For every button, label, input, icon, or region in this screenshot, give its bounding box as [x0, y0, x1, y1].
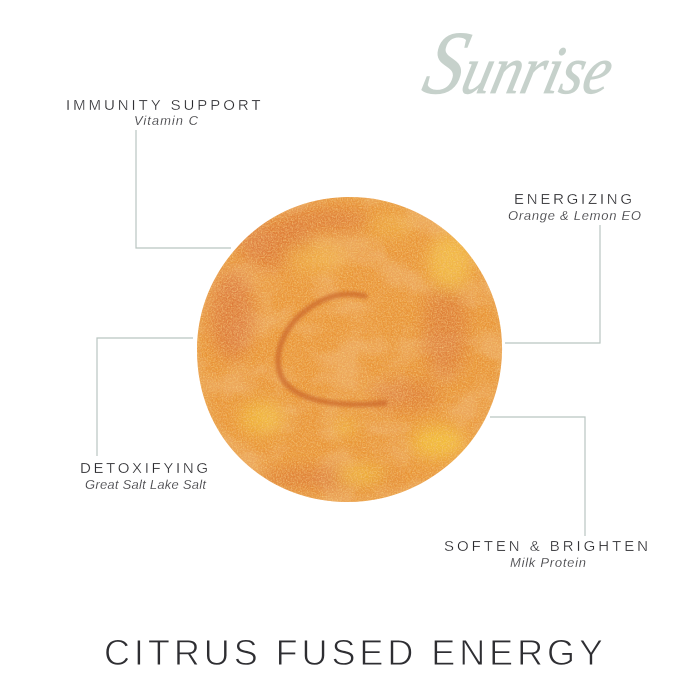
connector: soften	[490, 417, 585, 536]
subtext: great salt lake salt: Great Salt Lake Salt	[85, 477, 207, 492]
subtext: orange and lemon eo: Orange & Lemon EO	[508, 208, 641, 223]
heading: energizing: ENERGIZING	[514, 191, 632, 208]
heading: soften and brighten: SOFTEN & BRIGHTEN	[444, 538, 648, 555]
heading: immunity support: IMMUNITY SUPPORT	[66, 97, 260, 114]
subtext: milk protein: Milk Protein	[510, 555, 586, 570]
callout: detoxifying	[80, 338, 208, 492]
bath bomb illustration	[190, 190, 510, 510]
connector: energizing	[505, 225, 600, 343]
callout: soften and brighten	[444, 417, 648, 570]
tagline: CITRUS FUSED ENERGY	[104, 632, 603, 673]
title: Sunrise: Sunrise	[415, 13, 626, 113]
callout: immunity support	[66, 97, 260, 248]
callout: energizing	[505, 191, 641, 343]
connector: immunity	[136, 130, 231, 248]
subtext: vitamin c: Vitamin C	[134, 113, 199, 128]
icon: embossed letter C	[278, 294, 385, 404]
heading: detoxifying: DETOXIFYING	[80, 460, 208, 477]
connector: detoxifying	[97, 338, 193, 456]
